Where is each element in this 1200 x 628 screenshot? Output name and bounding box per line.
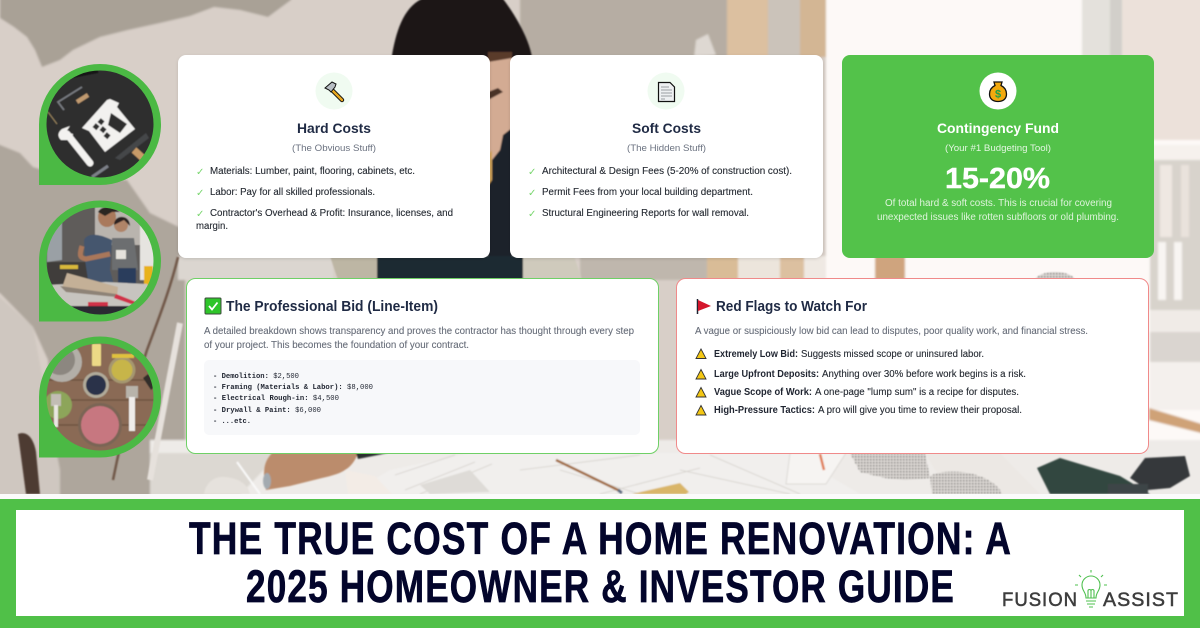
icon: light bulb <box>1075 570 1107 607</box>
description: of your project. This becomes the foundation of your contract. <box>204 340 469 351</box>
title text: 2025 HOMEOWNER & INVESTOR GUIDE <box>246 561 955 612</box>
brown stick <box>113 257 178 480</box>
heading: contingency fund: Contingency Fund <box>937 120 1059 136</box>
description: Of total hard & soft costs. This is crucial for covering <box>885 198 1112 209</box>
checklist: ✓ <box>528 209 536 220</box>
title banner <box>0 499 1200 628</box>
panel: soft costs <box>510 55 823 258</box>
code block: line items: - Framing (Materials & Labor): $8,000 <box>213 384 373 392</box>
panel: red flags <box>676 278 1148 454</box>
panel: hard costs <box>178 55 490 258</box>
icon: money bag <box>980 72 1016 110</box>
panel: professional bid <box>186 278 658 454</box>
pin photo: house and tools <box>39 64 161 185</box>
panel: contingency fund <box>842 55 1154 258</box>
warning list: Vague Scope of Work: <box>714 387 812 398</box>
warning list: High-Pressure Tactics: <box>714 405 815 416</box>
blueprints <box>554 458 690 494</box>
warning list: A pro will give you time to review their proposal. <box>818 405 1022 416</box>
heading: red flags: Red Flags to Watch For <box>716 299 867 315</box>
description: A vague or suspiciously low bid can lead to disputes, poor quality work, and financial stress. <box>695 326 1088 337</box>
gap band between card rows <box>177 255 188 281</box>
description <box>204 326 634 351</box>
ruler <box>632 483 689 494</box>
statistic: 15-20% <box>945 163 1050 195</box>
house <box>82 99 135 152</box>
checklist: ✓ <box>196 167 204 178</box>
subheading: (Your #1 Budgeting Tool) <box>945 143 1051 154</box>
apron and sleeves <box>377 256 523 280</box>
logo: Fusion Assist: ASSIST <box>1103 590 1179 611</box>
checklist: Architectural & Design Fees (5-20% of construction cost). <box>542 166 792 177</box>
title text <box>189 513 1012 612</box>
subheading: (The Hidden Stuff) <box>627 143 706 154</box>
warning list: Suggests missed scope or uninsured labor. <box>801 349 984 360</box>
hammer <box>115 133 149 160</box>
warning list <box>696 349 1026 416</box>
description: unexpected issues like rotten subfloors or old plumbing. <box>877 212 1119 223</box>
checklist: Labor: Pay for all skilled professionals. <box>210 187 375 198</box>
pin photo: couple at workbench <box>39 200 161 325</box>
heading: soft costs: Soft Costs <box>632 120 701 136</box>
hand <box>264 453 358 490</box>
checklist <box>196 166 453 232</box>
hair <box>392 0 532 60</box>
heading: hard costs: Hard Costs <box>297 120 371 136</box>
code block: line items: - Electrical Rough-in: $4,500 <box>213 395 339 403</box>
icon: check box <box>205 298 221 314</box>
warning list: Anything over 30% before work begins is a risk. <box>822 369 1026 380</box>
safety glasses <box>786 453 846 484</box>
checklist: Permit Fees from your local building department. <box>542 187 753 198</box>
drill <box>1037 458 1150 494</box>
subheading: (The Obvious Stuff) <box>292 143 376 154</box>
checklist: ✓ <box>196 209 204 220</box>
logo: Fusion Assist <box>1002 570 1179 611</box>
description: A detailed breakdown shows transparency and proves the contractor has thought through every step <box>204 326 634 337</box>
checklist: ✓ <box>528 188 536 199</box>
white strip under the photo <box>0 494 1200 499</box>
basket <box>1035 272 1075 290</box>
face at gap between cards <box>487 128 513 257</box>
pin photo: paint cans <box>39 336 161 461</box>
man <box>84 235 114 285</box>
logo: Fusion Assist: FUSION <box>1002 590 1078 611</box>
gloves <box>850 453 930 480</box>
wrench <box>67 134 90 163</box>
pencil <box>556 460 620 491</box>
checklist: Structural Engineering Reports for wall removal. <box>542 208 749 219</box>
woman <box>112 238 138 270</box>
icon: hammer <box>316 72 352 110</box>
icon: red flag <box>698 299 711 314</box>
heading: professional bid: The Professional Bid (Line-Item) <box>226 299 438 315</box>
icon: document <box>648 72 684 110</box>
code block: line items: - Demolition: $2,500 <box>213 373 299 381</box>
checklist <box>528 166 792 220</box>
checklist: ✓ <box>528 167 536 178</box>
warning list: Large Upfront Deposits: <box>714 369 819 380</box>
warning list: A one-page "lump sum" is a recipe for disputes. <box>815 387 1019 398</box>
allen key <box>58 87 82 110</box>
dowel <box>77 95 88 102</box>
code block: line items: - Drywall & Paint: $6,000 <box>213 407 321 415</box>
warning list: Extremely Low Bid: <box>714 349 798 360</box>
checklist: ✓ <box>196 188 204 199</box>
checklist: Materials: Lumber, paint, flooring, cabinets, etc. <box>210 166 415 177</box>
bench with catalogs <box>52 281 148 307</box>
checklist: Contractor's Overhead & Profit: Insurance, licenses, and <box>210 208 453 219</box>
code block: line items <box>204 360 640 435</box>
description <box>877 198 1119 223</box>
code block: line items: - ...etc. <box>213 418 251 426</box>
icon: money bag: $ <box>995 88 1001 100</box>
checklist: margin. <box>196 221 228 232</box>
